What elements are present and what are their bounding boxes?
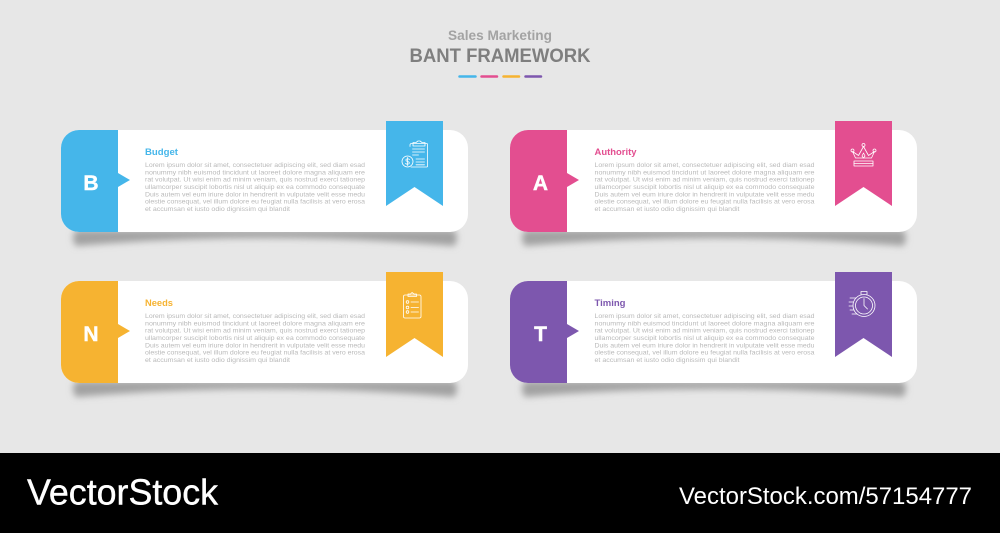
card body: [61, 130, 468, 232]
card body: [510, 281, 917, 383]
body text: nonummy nibh euismod tincidunt ut laoreet dolore magna aliquam ere: [145, 320, 365, 327]
body text: et accumsan et iusto odio dignissim qui blandit: [594, 357, 740, 364]
body text: Lorem ipsum dolor sit amet, consectetuer adipiscing elit, sed diam esad: [145, 162, 365, 169]
body text: Duis autem vel eum iriure dolor in hendrerit in vulputate velit esse medu: [145, 342, 365, 349]
body text: Duis autem vel eum iriure dolor in hendrerit in vulputate velit esse medu: [594, 191, 815, 198]
ribbon: [386, 272, 443, 357]
body text: ullamcorper suscipit lobortis nisl ut aliquip ex ea commodo consequate: [594, 335, 815, 342]
watermark logo: VectorStock: [27, 472, 219, 512]
footer bar: [0, 453, 1000, 533]
ribbon: [835, 272, 892, 357]
body text: [145, 162, 365, 213]
card shadow: [522, 230, 906, 246]
letter tab: [510, 130, 579, 232]
body text: Duis autem vel eum iriure dolor in hendrerit in vulputate velit esse medu: [145, 191, 365, 198]
body text: [594, 313, 815, 364]
body text: Lorem ipsum dolor sit amet, consectetuer adipiscing elit, sed diam esad: [145, 313, 365, 320]
letter T: T: [534, 323, 547, 346]
body text: olestie consequat, vel illum dolore eu feugiat nulla facilisis at vero erosa: [594, 350, 815, 357]
body text: rat volutpat. Ut wisi enim ad minim veniam, quis nostrud exerci tationep: [594, 328, 815, 335]
body text: et accumsan et iusto odio dignissim qui blandit: [145, 206, 290, 213]
body text: rat volutpat. Ut wisi enim ad minim veniam, quis nostrud exerci tationep: [145, 328, 365, 335]
card shadow: [73, 230, 457, 246]
body text: nonummy nibh euismod tincidunt ut laoreet dolore magna aliquam ere: [594, 320, 815, 327]
body text: [145, 313, 365, 364]
body text: et accumsan et iusto odio dignissim qui blandit: [594, 206, 740, 213]
ribbon: [386, 121, 443, 206]
heading: budget: Budget: [145, 147, 179, 158]
body text: ullamcorper suscipit lobortis nisl ut aliquip ex ea commodo consequate: [145, 184, 365, 191]
body text: Lorem ipsum dolor sit amet, consectetuer adipiscing elit, sed diam esad: [594, 162, 815, 169]
card shadow: [73, 381, 457, 397]
card body: [61, 281, 468, 383]
body text: Lorem ipsum dolor sit amet, consectetuer adipiscing elit, sed diam esad: [594, 313, 815, 320]
body text: ullamcorper suscipit lobortis nisl ut aliquip ex ea commodo consequate: [145, 335, 365, 342]
panel: timing: [510, 272, 917, 397]
ribbon: [835, 121, 892, 206]
icon: clipboard with dollar: [402, 141, 428, 167]
body text: nonummy nibh euismod tincidunt ut laoreet dolore magna aliquam ere: [594, 169, 815, 176]
letter tab: [61, 130, 130, 232]
letter A: A: [533, 172, 548, 195]
panel: budget: [61, 121, 468, 246]
heading: authority: Authority: [594, 147, 637, 158]
body text: olestie consequat, vel illum dolore eu feugiat nulla facilisis at vero erosa: [145, 199, 365, 206]
title: [410, 28, 590, 67]
icon: stopwatch: [849, 292, 875, 316]
body text: rat volutpat. Ut wisi enim ad minim veniam, quis nostrud exerci tationep: [145, 177, 365, 184]
body text: [594, 162, 815, 213]
body text: rat volutpat. Ut wisi enim ad minim veniam, quis nostrud exerci tationep: [594, 177, 815, 184]
body text: Duis autem vel eum iriure dolor in hendrerit in vulputate velit esse medu: [594, 342, 815, 349]
letter tab: [510, 281, 579, 383]
body text: et accumsan et iusto odio dignissim qui blandit: [145, 357, 290, 364]
image url: VectorStock.com/57154777: [679, 483, 972, 510]
card shadow: [522, 381, 906, 397]
body text: olestie consequat, vel illum dolore eu feugiat nulla facilisis at vero erosa: [145, 350, 365, 357]
letter N: N: [83, 323, 99, 346]
title: BANT FRAMEWORK: [410, 45, 590, 67]
body text: olestie consequat, vel illum dolore eu feugiat nulla facilisis at vero erosa: [594, 199, 815, 206]
body text: nonummy nibh euismod tincidunt ut laoreet dolore magna aliquam ere: [145, 169, 365, 176]
title: Sales Marketing: [448, 28, 552, 43]
title accent dashes: [460, 75, 541, 78]
letter B: B: [83, 172, 99, 195]
panel: needs: [61, 272, 468, 397]
heading: timing: Timing: [594, 298, 626, 309]
heading: needs: Needs: [145, 298, 173, 309]
icon: checklist clipboard: [404, 292, 421, 318]
body text: ullamcorper suscipit lobortis nisl ut aliquip ex ea commodo consequate: [594, 184, 815, 191]
letter tab: [61, 281, 130, 383]
card body: [510, 130, 917, 232]
panel: authority: [510, 121, 917, 246]
icon: crown: [851, 144, 876, 166]
